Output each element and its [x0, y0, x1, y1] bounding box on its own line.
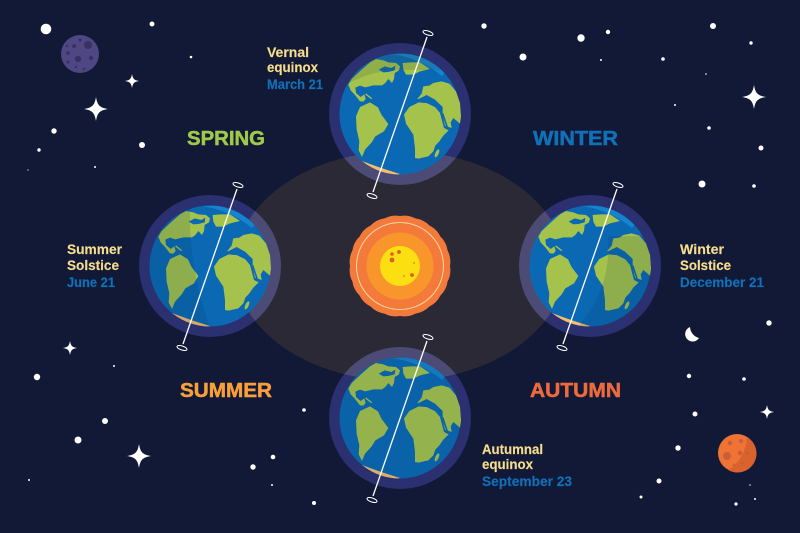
label: vernal equinox: equinox: [267, 60, 318, 75]
earth: autumnal equinox: [339, 333, 462, 504]
heading: winter: WINTER: [533, 128, 619, 150]
icon: red planet: [718, 434, 757, 473]
label: vernal equinox: March 21: [267, 77, 323, 92]
icon: purple planet: [61, 35, 99, 73]
earth: winter solstice: [530, 181, 660, 352]
label: autumnal equinox: Autumnal: [482, 442, 543, 457]
label: winter solstice: [680, 242, 764, 290]
earth: vernal equinox: [338, 29, 462, 200]
earth: summer solstice: [140, 181, 272, 352]
heading: spring: SPRING: [187, 128, 265, 150]
label: vernal equinox: Vernal: [267, 45, 309, 60]
label: autumnal equinox: [482, 442, 572, 489]
icon: crescent moon: [685, 327, 699, 342]
label: vernal equinox: [267, 45, 323, 92]
label: summer solstice: Summer: [67, 242, 123, 257]
atmosphere overlap with orbit: [249, 155, 551, 376]
label: summer solstice: [67, 242, 123, 290]
sun: [350, 216, 450, 316]
heading: autumn: AUTUMN: [530, 380, 621, 402]
label: summer solstice: June 21: [67, 275, 115, 290]
label: winter solstice: Winter: [680, 242, 725, 257]
label: summer solstice: Solstice: [67, 258, 119, 273]
label: winter solstice: December 21: [680, 275, 764, 290]
label: autumnal equinox: September 23: [482, 474, 572, 489]
earth atmosphere rings: [139, 43, 661, 489]
orbit shadow ellipse: [235, 151, 565, 381]
heading: summer: SUMMER: [180, 380, 273, 402]
label: autumnal equinox: equinox: [482, 457, 533, 472]
sun scalloped corona: [350, 216, 450, 316]
label: winter solstice: Solstice: [680, 258, 731, 273]
